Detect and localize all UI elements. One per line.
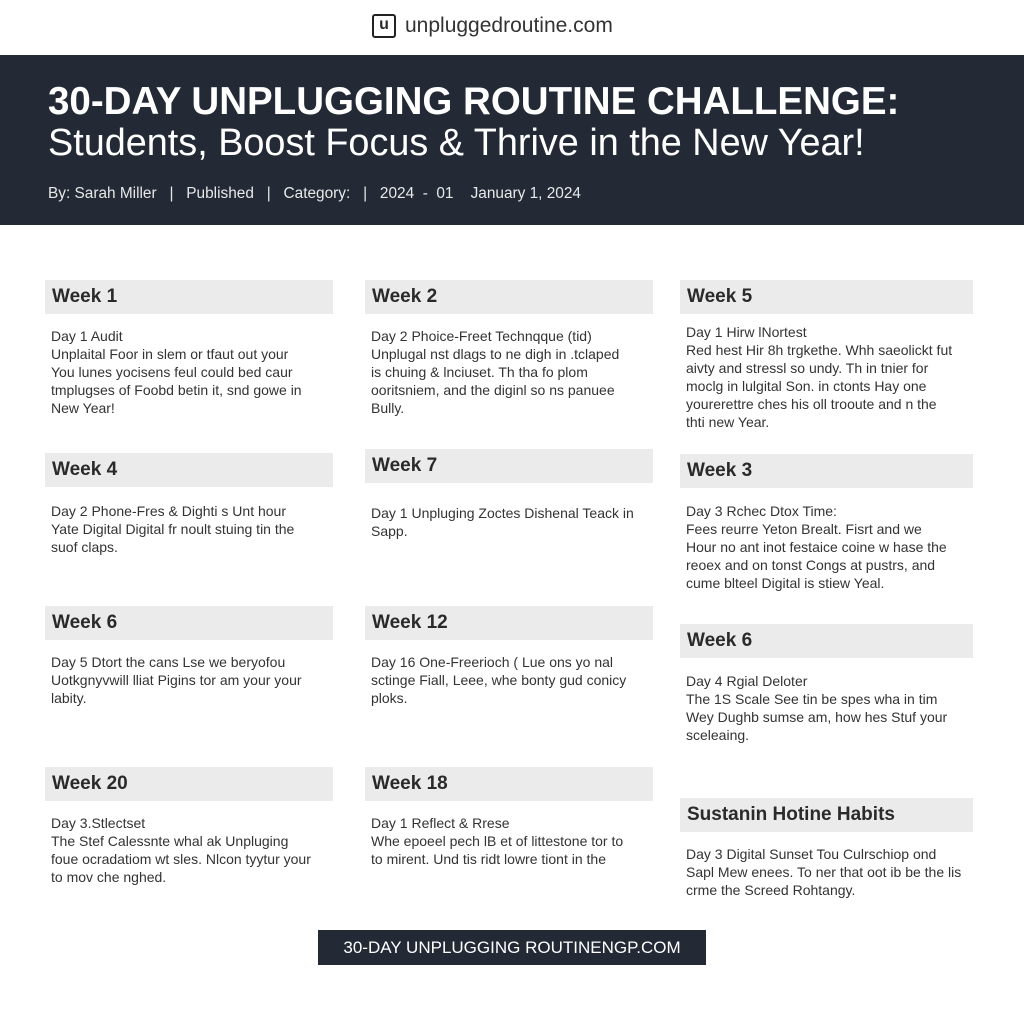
icon: logo square (372, 14, 396, 38)
panel: week 18 (365, 767, 653, 867)
panel: week 20: Week 20 (52, 773, 128, 794)
panel: week 3: cume blteel Digital is stiew Yeal. (686, 575, 884, 591)
panel: sustain habits: Sustanin Hotine Habits (687, 804, 895, 825)
panel: week 5: thti new Year. (686, 414, 769, 430)
panel: week 20 (45, 767, 333, 885)
panel: week 6 (45, 606, 333, 706)
panel: week 6: labity. (51, 690, 87, 706)
panel: week 1: Week 1 (52, 286, 117, 307)
panel: week 2: Bully. (371, 400, 404, 416)
panel: week 3: Week 3 (687, 460, 752, 481)
panel: week 12: Day 16 One-Freerioch ( Lue ons yo nal (371, 654, 613, 670)
panel: week 7: Week 7 (372, 455, 437, 476)
panel: week 4: Yate Digital Digital fr noult stuing tin the (51, 521, 294, 537)
panel: sustain habits: Sapl Mew enees. To ner that oot ib be the lis (686, 864, 961, 880)
panel: week 4: Week 4 (52, 459, 117, 480)
logo: site domain: unpluggedroutine.com (405, 14, 613, 37)
panel: week 5: Day 1 Hirw lNortest (686, 324, 807, 340)
panel: week 2: ooritsniem, and the diginl so ns panuee (371, 382, 615, 398)
panel: week 1 (45, 280, 333, 416)
panel: week 2: Week 2 (372, 286, 437, 307)
panel: week 6 (right): Wey Dughb sumse am, how hes Stuf your (686, 709, 947, 725)
panel: week 1: New Year! (51, 400, 115, 416)
panel: week 3: Hour no ant inot festaice coine w hase the (686, 539, 947, 555)
panel: week 6: Week 6 (52, 612, 117, 633)
panel: week 20: to mov che nghed. (51, 869, 166, 885)
panel: week 3 (680, 454, 973, 591)
panel: week 18: to mirent. Und tis ridt lowre tiont in the (371, 851, 606, 867)
panel: week 5: moclg in lulgital Son. in ctonts Hay one (686, 378, 926, 394)
panel: week 7 (365, 449, 653, 539)
panel: week 1: Unplaital Foor in slem or tfaut out your (51, 346, 288, 362)
panel: week 20: Day 3.Stlectset (51, 815, 145, 831)
panel: week 2: is chuing & lnciuset. Th tha fo plom (371, 364, 588, 380)
panel: week 12: ploks. (371, 690, 408, 706)
panel: week 7: Sapp. (371, 523, 408, 539)
panel: week 5 (680, 280, 973, 430)
panel: week 3: Fees reurre Yeton Brealt. Fisrt and we (686, 521, 922, 537)
panel: week 20: foue ocradatiom wt sles. Nlcon tyytur your (51, 851, 311, 867)
panel: week 3: Day 3 Rchec Dtox Time: (686, 503, 837, 519)
panel: week 7: Day 1 Unpluging Zoctes Dishenal Teack in (371, 505, 634, 521)
panel: week 12 (365, 606, 653, 706)
panel: week 6 (right): The 1S Scale See tin be spes wha in tim (686, 691, 937, 707)
panel: week 6 (right): Day 4 Rgial Deloter (686, 673, 807, 689)
panel: week 4: suof claps. (51, 539, 118, 555)
panel: week 6: Uotkgnyvwill lliat Pigins tor am your your (51, 672, 302, 688)
panel: week 2: Day 2 Phoice-Freet Technqque (tid) (371, 328, 592, 344)
panel: sustain habits: crme the Screed Rohtangy. (686, 882, 855, 898)
byline: By: Sarah Miller | Published | Category: | 2024 - 01 January 1, 2024 (48, 185, 581, 202)
panel: week 4: Day 2 Phone-Fres & Dighti s Unt hour (51, 503, 286, 519)
panel: week 18: Week 18 (372, 773, 448, 794)
panel: week 5: Red hest Hir 8h trgkethe. Whh saeolickt fut (686, 342, 952, 358)
panel: week 3: reoex and on tonst Congs at pustrs, and (686, 557, 935, 573)
panel: week 2 (365, 280, 653, 416)
panel: sustain habits (680, 798, 973, 898)
panel: week 2: Unplugal nst dlags to ne digh in .tclaped (371, 346, 619, 362)
panel: week 20: The Stef Calessnte whal ak Unpluging (51, 833, 288, 849)
title: 30-DAY UNPLUGGING ROUTINE CHALLENGE: (48, 80, 899, 123)
header band (0, 55, 1024, 225)
panel: week 6: Day 5 Dtort the cans Lse we beryofou (51, 654, 285, 670)
panel: week 18: Whe epoeel pech lB et of littestone tor to (371, 833, 623, 849)
panel: sustain habits: Day 3 Digital Sunset Tou Culrschiop ond (686, 846, 936, 862)
panel: week 12: sctinge Fiall, Leee, whe bonty gud conicy (371, 672, 626, 688)
icon: logo square: u (379, 16, 389, 33)
panel: week 4 (45, 453, 333, 555)
panel: week 5: yourerettre ches his oll trooute and n the (686, 396, 937, 412)
panel: week 1: You lunes yocisens feul could bed caur (51, 364, 293, 380)
footer banner: 30-DAY UNPLUGGING ROUTINENGP.COM (343, 938, 681, 957)
panel: week 6 (right): Week 6 (687, 630, 752, 651)
panel: week 5: Week 5 (687, 286, 752, 307)
footer banner (318, 930, 706, 965)
panel: week 6 (right): sceleaing. (686, 727, 749, 743)
panel: week 18: Day 1 Reflect & Rrese (371, 815, 510, 831)
panel: week 12: Week 12 (372, 612, 448, 633)
subtitle: Students, Boost Focus & Thrive in the New Year! (48, 122, 865, 164)
panel: week 5: aivty and stressl so undy. Th in tnier for (686, 360, 928, 376)
panel: week 6 (right) (680, 624, 973, 743)
panel: week 1: Day 1 Audit (51, 328, 123, 344)
panel: week 1: tmplugses of Foobd betin it, snd gowe in (51, 382, 302, 398)
